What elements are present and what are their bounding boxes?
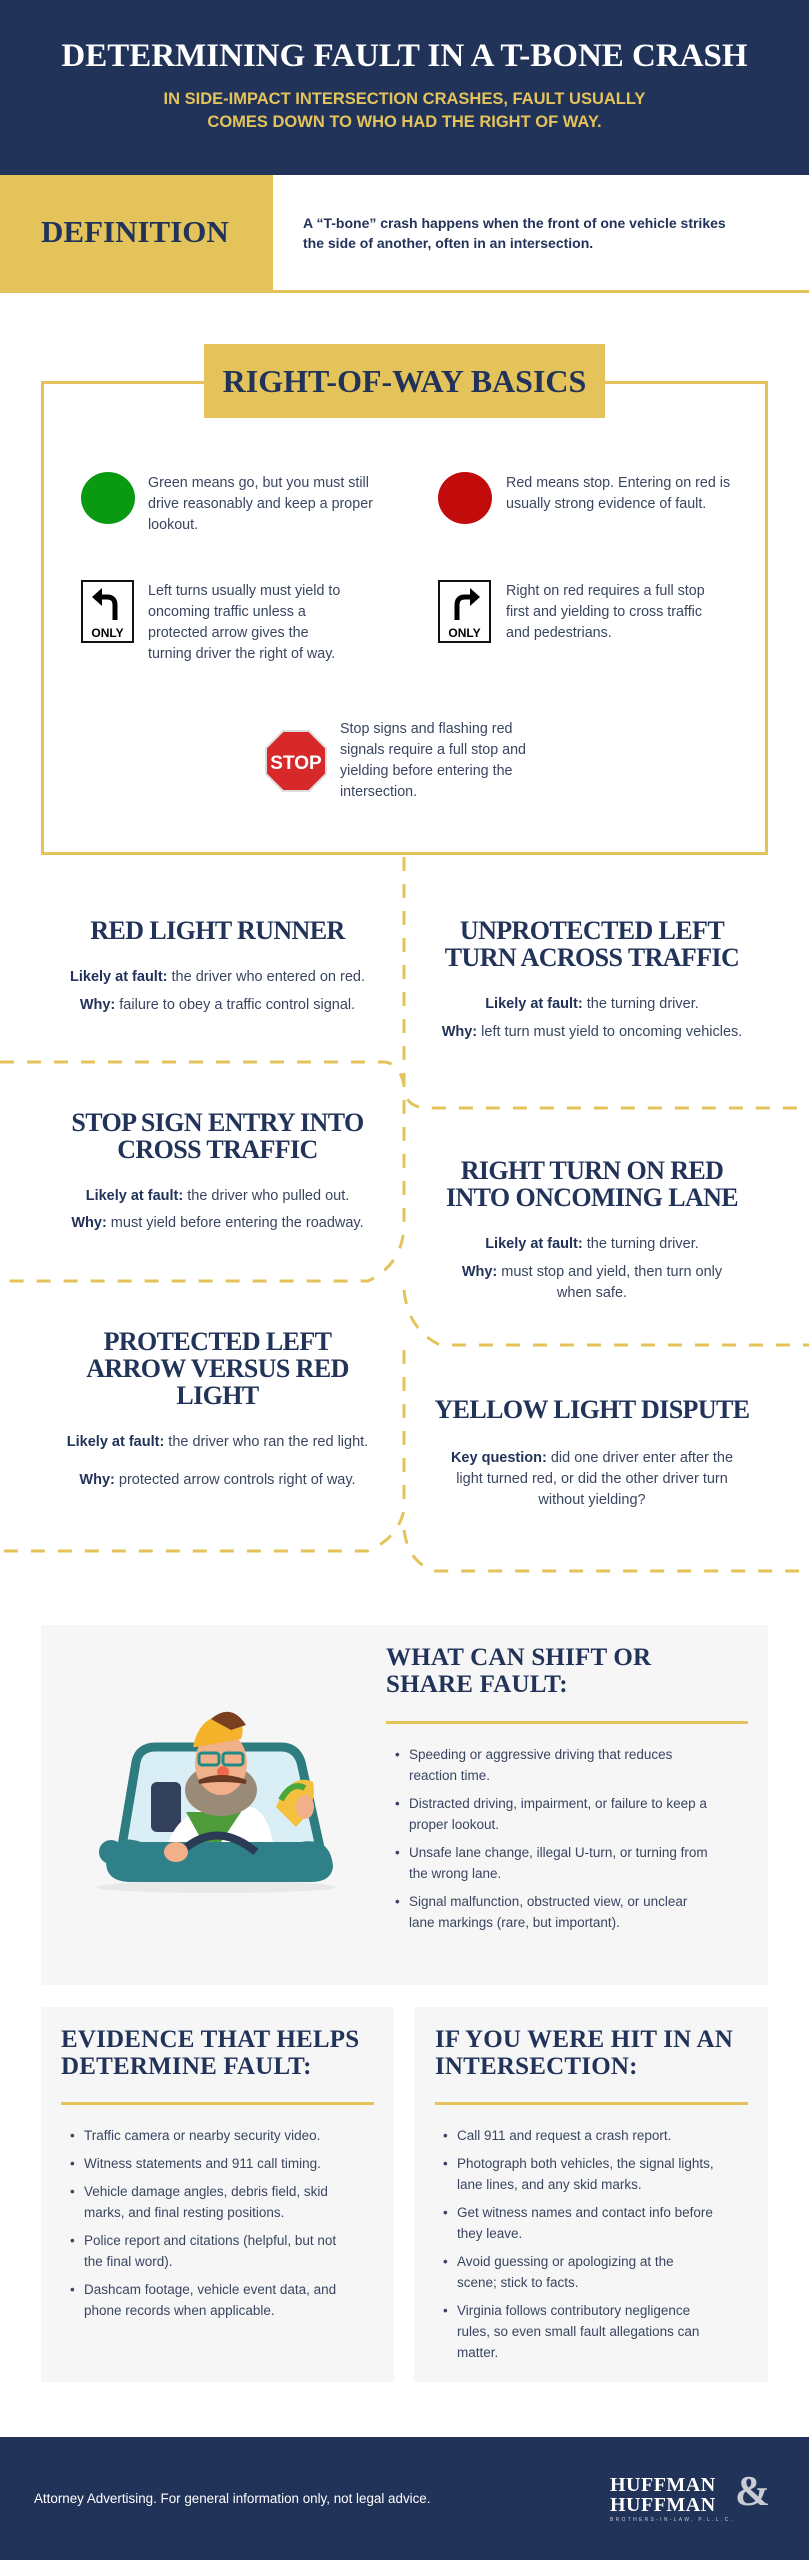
scenario: red light runner (70, 916, 365, 1013)
icon: stop sign (265, 730, 327, 792)
heading: WHAT CAN SHIFT OR (386, 1644, 651, 1671)
scenario: right turn on red: Likely at fault: the turning driver. (485, 1236, 699, 1252)
heading: IF YOU WERE HIT IN AN (435, 2026, 733, 2053)
bullet list: they leave. (457, 2226, 522, 2241)
bullet list: Distracted driving, impairment, or failure to keep a (409, 1796, 707, 1811)
scenario: unprotected left turn: UNPROTECTED LEFT (460, 916, 724, 945)
text: green: Green means go, but you must still drive reasonably and keep a proper lookout. (148, 475, 373, 533)
scenario: protected left arrow: Why: protected arrow controls right of way. (79, 1472, 356, 1488)
scenario: stop sign entry: STOP SIGN ENTRY INTO (71, 1108, 364, 1137)
scenario: stop sign entry: Why: must yield before entering the roadway. (71, 1215, 364, 1231)
heading (386, 1644, 652, 1698)
scenario: stop sign entry: Likely at fault: the driver who pulled out. (86, 1188, 349, 1204)
icon: right only sign (438, 580, 491, 643)
bullet list: reaction time. (409, 1768, 490, 1783)
scenario: red light runner: Why: failure to obey a traffic control signal. (80, 997, 355, 1013)
footer (0, 2437, 809, 2560)
bullet list: Vehicle damage angles, debris field, skid (84, 2184, 328, 2199)
subtitle: COMES DOWN TO WHO HAD THE RIGHT OF WAY. (207, 113, 602, 131)
bullet list: Police report and citations (helpful, but not (84, 2233, 336, 2248)
subtitle (164, 90, 646, 131)
bullet list: proper lookout. (409, 1817, 499, 1832)
panel: evidence (41, 2007, 394, 2382)
scenario: protected left arrow: PROTECTED LEFT (104, 1327, 331, 1356)
scenario: stop sign entry: CROSS TRAFFIC (117, 1135, 318, 1164)
bullet list: lane markings (rare, but important). (409, 1915, 620, 1930)
disclaimer: Attorney Advertising. For general information only, not legal advice. (34, 2491, 430, 2506)
scenario: unprotected left turn (442, 916, 742, 1040)
panel: right-of-way basics (41, 381, 768, 855)
scenario: right turn on red: Why: must stop and yield, then turn only (462, 1264, 722, 1280)
icon: right only sign: ONLY (448, 626, 481, 640)
bullet list (444, 2128, 714, 2360)
icon: green light (81, 472, 135, 524)
heading: DETERMINE FAULT: (61, 2053, 312, 2080)
definition text: A “T-bone” crash happens when the front of one vehicle strikes (303, 215, 726, 231)
bullet list: Dashcam footage, vehicle event data, and (84, 2282, 336, 2297)
scenario: right turn on red: when safe. (557, 1285, 627, 1301)
definition label (0, 175, 273, 290)
scenario: protected left arrow (67, 1327, 368, 1488)
text: left turns: Left turns usually must yield to oncoming traffic unless a protected arrow gives the turning driver the right of way. (148, 583, 340, 662)
subtitle: IN SIDE-IMPACT INTERSECTION CRASHES, FAULT USUALLY (164, 90, 645, 108)
scenario: yellow light dispute (434, 1395, 750, 1508)
heading (435, 2026, 733, 2080)
bullet list: Witness statements and 911 call timing. (84, 2156, 321, 2171)
definition text: the side of another, often in an intersection. (303, 235, 593, 251)
icon: red light (438, 472, 492, 524)
heading: right-of-way basics (204, 344, 605, 418)
bullet list (70, 2128, 336, 2318)
bullet list: Unsafe lane change, illegal U-turn, or turning from (409, 1845, 708, 1860)
text: right on red: Right on red requires a full stop first and yielding to cross traffic and pedestrians. (506, 583, 705, 641)
scenario: right turn on red: INTO ONCOMING LANE (446, 1183, 738, 1212)
bullet list: Speeding or aggressive driving that reduces (409, 1747, 672, 1762)
bullet list: marks, and final resting positions. (84, 2205, 284, 2220)
bullet list: Avoid guessing or apologizing at the (457, 2254, 674, 2269)
bullet list: phone records when applicable. (84, 2303, 275, 2318)
bullet list: rules, so even small fault allegations can (457, 2324, 699, 2339)
logo: HUFFMAN (610, 2474, 716, 2496)
panel: if you were hit (414, 2007, 768, 2382)
scenario: protected left arrow: ARROW VERSUS RED (86, 1354, 349, 1383)
logo: BROTHERS-IN-LAW, P.L.L.C. (610, 2517, 734, 2523)
bullet list: the wrong lane. (409, 1866, 501, 1881)
definition label: DEFINITION (41, 214, 229, 249)
bullet list: matter. (457, 2345, 498, 2360)
icon: left only sign (81, 580, 134, 643)
bullet list: Call 911 and request a crash report. (457, 2128, 671, 2143)
bullet list: scene; stick to facts. (457, 2275, 579, 2290)
scenario: yellow light dispute: YELLOW LIGHT DISPUTE (434, 1395, 750, 1424)
title: DETERMINING FAULT IN A T-BONE CRASH (61, 38, 748, 74)
text: red: Red means stop. Entering on red is usually strong evidence of fault. (506, 475, 730, 512)
heading (61, 2026, 359, 2080)
bullet list: Signal malfunction, obstructed view, or unclear (409, 1894, 687, 1909)
logo: & (735, 2469, 770, 2515)
scenario: protected left arrow: LIGHT (176, 1381, 259, 1410)
scenario: red light runner: Likely at fault: the driver who entered on red. (70, 969, 365, 985)
dashed scenario grid lines (0, 857, 809, 1572)
scenario: right turn on red: RIGHT TURN ON RED (461, 1156, 723, 1185)
scenario: protected left arrow: Likely at fault: the driver who ran the red light. (67, 1434, 368, 1450)
scenario: unprotected left turn: TURN ACROSS TRAFFIC (445, 943, 739, 972)
bullet list: Traffic camera or nearby security video. (84, 2128, 320, 2143)
scenario: right turn on red (446, 1156, 738, 1301)
scenario: unprotected left turn: Why: left turn must yield to oncoming vehicles. (442, 1024, 742, 1040)
scenario: yellow light dispute: Key question: did one driver enter after the (451, 1450, 733, 1466)
heading: SHARE FAULT: (386, 1671, 568, 1698)
heading: INTERSECTION: (435, 2053, 638, 2080)
bullet list (396, 1747, 708, 1930)
logo (610, 2469, 770, 2523)
panel: what can shift or share fault (41, 1625, 768, 1985)
bullet list: Get witness names and contact info before (457, 2205, 713, 2220)
icon: stop sign: STOP (270, 753, 322, 774)
bullet list: Virginia follows contributory negligence (457, 2303, 690, 2318)
scenario: yellow light dispute: without yielding? (538, 1492, 646, 1508)
scenario: stop sign entry (71, 1108, 364, 1231)
scenario: red light runner: RED LIGHT RUNNER (90, 916, 345, 945)
text: stop signs: Stop signs and flashing red signals require a full stop and yielding before entering the intersection. (340, 721, 526, 800)
header (0, 0, 809, 175)
definition text (303, 215, 726, 251)
heading: EVIDENCE THAT HELPS (61, 2026, 359, 2053)
bullet list: Photograph both vehicles, the signal lights, (457, 2156, 714, 2171)
heading: right-of-way basics: RIGHT-OF-WAY BASICS (223, 363, 586, 399)
illustration: driver with taco (96, 1712, 336, 1893)
bullet list: the final word). (84, 2254, 173, 2269)
logo: HUFFMAN (610, 2494, 716, 2516)
scenario: yellow light dispute: light turned red, or did the other driver turn (456, 1471, 728, 1487)
bullet list: lane lines, and any skid marks. (457, 2177, 642, 2192)
scenario: unprotected left turn: Likely at fault: the turning driver. (485, 996, 699, 1012)
icon: left only sign: ONLY (91, 626, 124, 640)
definition band (0, 175, 809, 293)
